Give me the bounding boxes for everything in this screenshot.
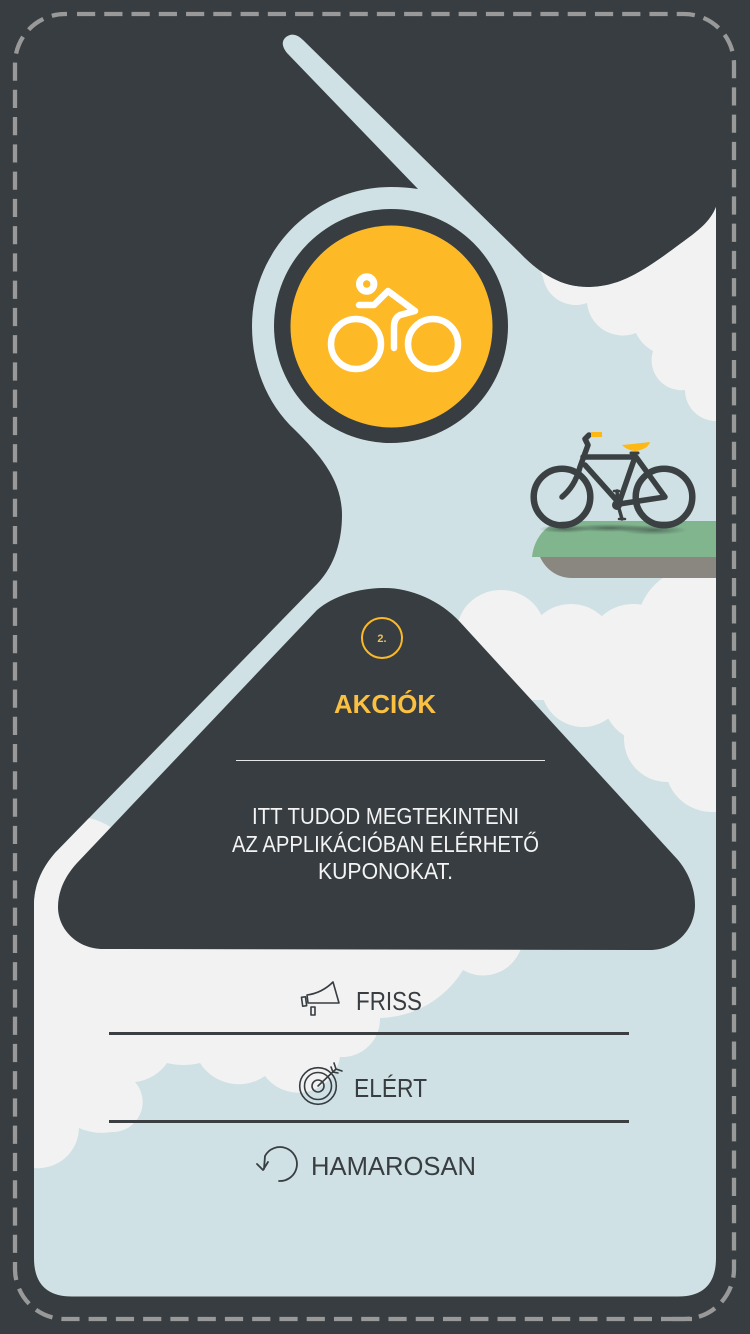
menu item: elert	[300, 1063, 427, 1104]
cloud: top right	[540, 200, 716, 421]
description text: KUPONOKAT.	[318, 858, 453, 884]
description text	[232, 803, 539, 884]
icon: target	[300, 1063, 342, 1104]
step number badge	[362, 618, 402, 658]
cloud: lower left	[34, 818, 540, 1168]
handlebar grip	[591, 432, 602, 437]
icon: undo arrow	[257, 1147, 297, 1181]
divider line	[109, 1032, 629, 1035]
yellow badge with cyclist	[274, 209, 508, 443]
heading: AKCIÓK	[334, 689, 436, 719]
platform grass	[532, 521, 716, 557]
menu item: friss: FRISS	[356, 986, 422, 1016]
platform rock	[540, 550, 716, 578]
icon: bicycle	[534, 432, 692, 525]
triangle shape	[58, 588, 695, 950]
menu item: hamarosan: HAMAROSAN	[311, 1151, 476, 1181]
menu item: hamarosan	[257, 1147, 476, 1181]
icon: megaphone	[301, 982, 339, 1015]
cloud: middle right	[458, 578, 716, 812]
icon: cyclist	[331, 277, 458, 369]
badge disc	[290, 226, 492, 428]
grass platform with bicycle	[532, 432, 716, 578]
menu list	[109, 982, 629, 1181]
clouds	[34, 200, 750, 1168]
step number badge: 2.	[377, 633, 387, 645]
description text: AZ APPLIKÁCIÓBAN ELÉRHETŐ	[232, 831, 539, 857]
divider line	[109, 1120, 629, 1123]
description text: ITT TUDOD MEGTEKINTENI	[252, 803, 519, 829]
panel: info triangle	[58, 588, 695, 950]
heading divider	[236, 760, 545, 761]
menu item: elert: ELÉRT	[354, 1073, 427, 1103]
bicycle shadows	[539, 524, 687, 535]
badge ring	[274, 209, 508, 443]
saddle	[622, 442, 650, 451]
menu item: friss	[301, 982, 422, 1016]
